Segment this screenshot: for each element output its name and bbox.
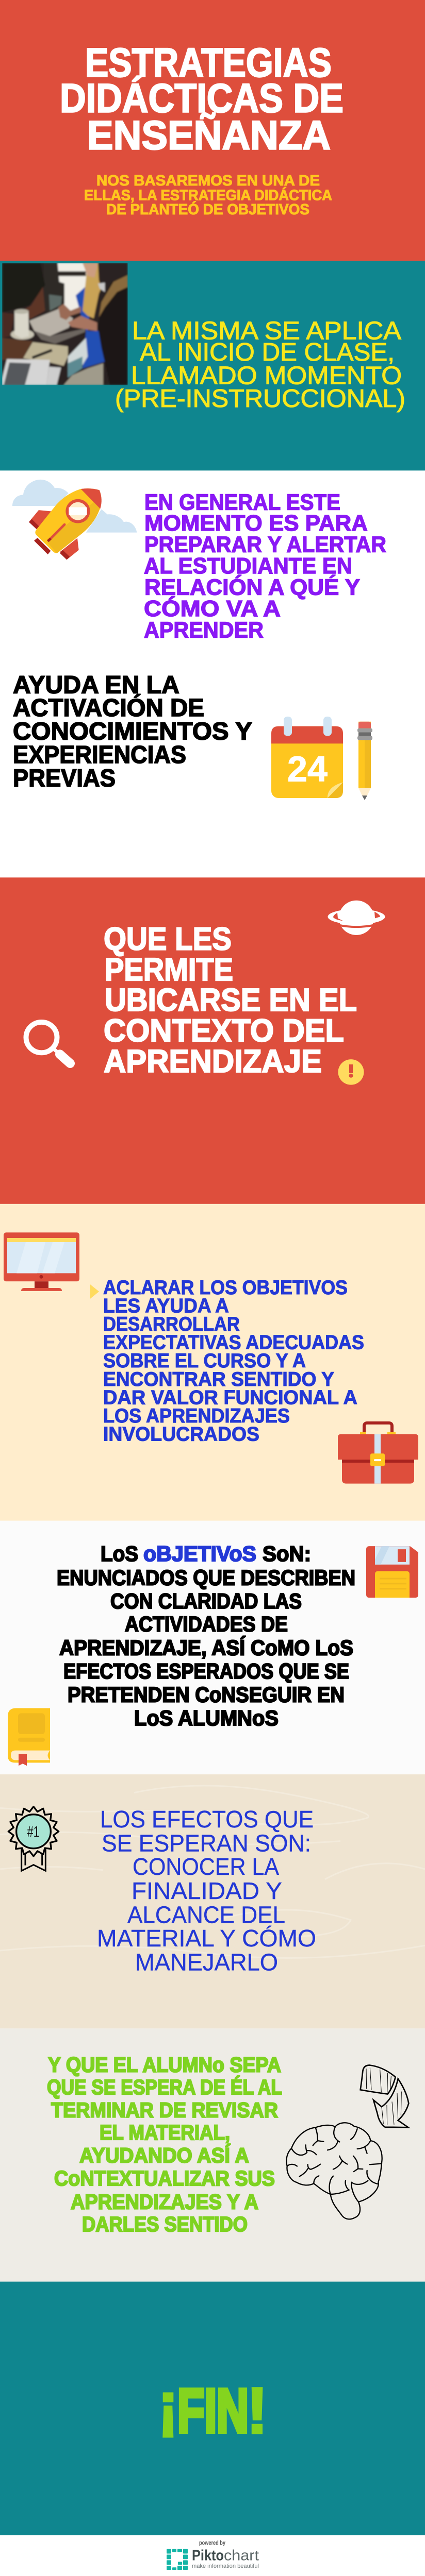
text: definition: EFECTOS ESPERADOS QUE SE xyxy=(63,1659,349,1683)
text: Piktochart wordmark: make information beautiful xyxy=(192,2563,259,2569)
text: subtitle xyxy=(84,173,332,218)
icon: book xyxy=(8,1708,50,1766)
heading: main title: DIDÁCTICAS DE xyxy=(60,75,344,121)
logo: Piktochart mark xyxy=(167,2549,188,2570)
text: green explanation: TERMINAR DE REVISAR xyxy=(51,2098,278,2122)
heading: the end: ¡ xyxy=(157,2369,179,2441)
text: context statement: UBICARSE EN EL xyxy=(105,982,357,1018)
text: definition: PRETENDEN CoNSEGUIR EN xyxy=(68,1683,345,1707)
text: when the strategy applies xyxy=(115,316,405,413)
text: green explanation: CoNTEXTUALIZAR SUS xyxy=(54,2166,275,2190)
panel: purpose of the moment xyxy=(0,470,425,800)
panel: learner expectations xyxy=(0,2028,425,2282)
text: purple explanation: PREPARAR Y ALERTAR xyxy=(144,532,386,557)
heading: main title: ESTRATEGIAS xyxy=(85,40,332,85)
text: purple explanation: CÓMO VA A xyxy=(144,596,281,621)
text: green explanation: Y QUE EL ALUMNo SEPA xyxy=(48,2053,281,2076)
text: subtitle: ELLAS, LA ESTRATEGIA DIDÁCTICA xyxy=(84,187,332,204)
text: blue explanation: LES AYUDA A xyxy=(103,1295,229,1317)
icon: briefcase xyxy=(338,1423,418,1484)
footer: Piktochart branding xyxy=(0,2535,425,2576)
text: purple explanation: APRENDER xyxy=(144,618,264,643)
heading: main title: ENSEÑANZA xyxy=(87,112,331,158)
text: blue explanation: ACLARAR LOS OBJETIVOS xyxy=(103,1277,348,1299)
text: green explanation: AYUDANDO ASÍ A xyxy=(79,2144,249,2167)
text: prior knowledge: PREVIAS xyxy=(13,765,116,792)
image: students working at a table xyxy=(2,263,128,385)
text: when the strategy applies: LA MISMA SE APLICA xyxy=(132,316,402,345)
text: when the strategy applies: LLAMADO MOMENTO xyxy=(131,361,402,389)
text: blue explanation: SOBRE EL CURSO Y A xyxy=(103,1350,306,1372)
text: purple explanation xyxy=(144,490,386,643)
icon: monitor xyxy=(4,1232,79,1291)
panel: ending xyxy=(0,2282,425,2535)
text: subtitle: NOS BASAREMOS EN UNA DE xyxy=(96,173,320,189)
panel: title xyxy=(0,0,425,261)
text: purple explanation: RELACIÓN A QUÉ Y xyxy=(144,574,360,600)
text: blue explanation: LOS APRENDIZAJES xyxy=(103,1405,290,1427)
text: green explanation: DARLES SENTIDO xyxy=(82,2212,248,2236)
text: when the strategy applies: (PRE-INSTRUCCIONAL) xyxy=(115,384,405,413)
text: green explanation: APRENDIZAJES Y A xyxy=(71,2190,258,2213)
text: purple explanation: MOMENTO ES PARA xyxy=(144,511,368,536)
text: definition: LoS ALUMNoS xyxy=(134,1706,279,1730)
text: Piktochart wordmark: Pikto xyxy=(192,2547,224,2564)
text: Piktochart wordmark xyxy=(192,2547,259,2569)
text: effects: MANEJARLO xyxy=(135,1949,278,1976)
text: definition: ENUNCIADOS QUE DESCRIBEN xyxy=(57,1566,355,1589)
text: effects: LOS EFECTOS QUE xyxy=(100,1806,314,1833)
text: blue explanation: EXPECTATIVAS ADECUADAS xyxy=(103,1332,364,1354)
heading: the end xyxy=(157,2369,268,2448)
text: definition: ACTIVIDADES DE xyxy=(125,1612,288,1636)
panel: definition of objectives xyxy=(0,1521,425,1774)
text: blue explanation: INVOLUCRADOS xyxy=(103,1423,259,1446)
text: prior knowledge xyxy=(13,671,252,792)
text: prior knowledge: CONOCIMIENTOS Y xyxy=(13,718,252,745)
text: when the strategy applies: AL INICIO DE CLASE, xyxy=(140,337,395,366)
text: prior knowledge: EXPERIENCIAS xyxy=(13,741,186,769)
text: purple explanation: EN GENERAL ESTE xyxy=(144,490,340,515)
text: effects: MATERIAL Y CÓMO xyxy=(97,1925,316,1952)
text: green explanation xyxy=(47,2053,282,2236)
icon: exclamation badge xyxy=(338,1059,364,1085)
text: context statement: CONTEXTO DEL xyxy=(104,1013,344,1048)
icon: pencil xyxy=(357,722,372,800)
icon: rocket with clouds xyxy=(12,480,137,560)
text: context statement xyxy=(104,921,357,1079)
panel: pre-instructional moment xyxy=(0,261,425,470)
text: powered by: powered by xyxy=(199,2539,225,2547)
heading: the end: ! xyxy=(246,2374,268,2448)
panel: expected effects xyxy=(0,1774,425,2028)
text: effects: FINALIDAD Y xyxy=(132,1877,282,1904)
heading: the end: FIN xyxy=(177,2377,249,2445)
arrow: yellow bullet xyxy=(90,1284,99,1299)
panel: context of learning xyxy=(0,877,425,1204)
text: prior knowledge: AYUDA EN LA xyxy=(13,671,179,699)
heading: main title xyxy=(60,40,344,158)
text: definition: APRENDIZAJE, ASÍ CoMO LoS xyxy=(59,1636,353,1660)
text: green explanation: EL MATERIAL, xyxy=(100,2121,230,2144)
text: blue explanation: ENCONTRAR SENTIDO Y xyxy=(103,1368,334,1391)
text: effects: CONOCER LA xyxy=(133,1853,280,1880)
text: context statement: QUE LES xyxy=(104,921,232,957)
icon: brain xyxy=(286,2123,382,2219)
text: blue explanation: DESARROLLAR xyxy=(103,1313,240,1335)
icon: planet xyxy=(328,901,385,935)
text: definition xyxy=(57,1541,355,1730)
text: definition: SoN: xyxy=(263,1541,311,1566)
icon: floppy disk xyxy=(366,1546,418,1598)
icon: calendar xyxy=(271,717,343,798)
text: context statement: APRENDIZAJE xyxy=(104,1043,322,1079)
text: blue explanation xyxy=(103,1277,364,1446)
icon: medal xyxy=(8,1807,59,1871)
text: purple explanation: AL ESTUDIANTE EN xyxy=(144,553,352,579)
text: context statement: PERMITE xyxy=(105,952,233,988)
text: subtitle: DE PLANTEÓ DE OBJETIVOS xyxy=(106,200,309,218)
icon: magnifying glass xyxy=(26,1022,70,1063)
icon: calendar: 24 xyxy=(287,749,328,789)
text: Piktochart wordmark: chart xyxy=(224,2547,259,2564)
text: blue explanation: DAR VALOR FUNCIONAL A xyxy=(103,1387,357,1409)
panel: clarify objectives xyxy=(0,1204,425,1521)
text: definition: LoS xyxy=(101,1541,138,1566)
text: prior knowledge: ACTIVACIÓN DE xyxy=(13,693,204,722)
text: effects: ALCANCE DEL xyxy=(127,1902,285,1928)
text: effects: SE ESPERAN SON: xyxy=(102,1830,311,1856)
text: green explanation: QUE SE ESPERA DE ÉL AL xyxy=(47,2075,282,2099)
icon: hand-drawn arrows xyxy=(361,2065,408,2127)
text: definition: oBJETIVoS xyxy=(143,1541,256,1566)
text: effects xyxy=(97,1806,316,1976)
icon: medal: #1 xyxy=(27,1823,40,1840)
text: definition: CON CLARIDAD LAS xyxy=(110,1589,302,1613)
